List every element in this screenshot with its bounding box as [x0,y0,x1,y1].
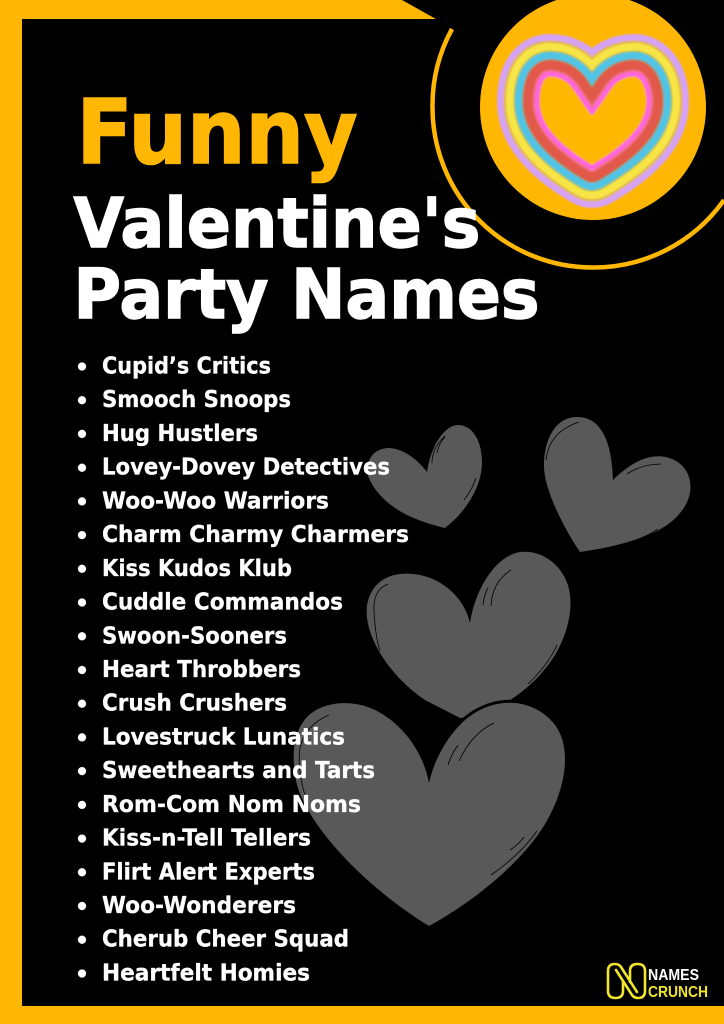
logo word: CRUNCH: CRUNCH [648,984,708,1001]
item: Kiss-n-Tell Tellers [102,825,311,852]
item: Rom-Com Nom Noms [102,791,361,818]
title line: Valentine's: Valentine's [74,184,480,264]
heart: tilted right [544,417,690,552]
item: Sweethearts and Tarts [102,757,375,784]
item: Smooch Snoops [102,386,291,413]
item: Cupid’s Critics [102,352,271,380]
item: Crush Crushers [102,690,287,717]
item: Cherub Cheer Squad [102,926,349,953]
yellow ring arc [432,29,724,268]
item: Charm Charmy Charmers [102,521,409,548]
title line: Funny: Funny [76,80,358,184]
heart: small tilted left [367,425,482,528]
item: Swoon-Sooners [102,622,287,649]
item: Hug Hustlers [102,420,258,447]
list of party names [78,352,409,986]
icon: N monogram [608,964,645,998]
item: Heartfelt Homies [102,960,310,986]
heart: biggest bottom [294,703,565,926]
heart: large middle [367,552,570,718]
item: Lovey-Dovey Detectives [102,454,390,481]
item: Cuddle Commandos [102,588,343,616]
title [74,80,540,335]
item: Woo-Woo Warriors [102,487,329,514]
icon: neon rainbow heart [537,74,649,168]
title line: Party Names: Party Names [74,255,540,335]
logo word: NAMES: NAMES [648,967,699,984]
logo: Names Crunch [608,964,708,1001]
yellow circle badge [480,0,706,220]
list bullets [78,362,86,978]
item: Flirt Alert Experts [102,858,315,885]
item: Heart Throbbers [102,656,301,683]
item: Woo-Wonderers [102,892,296,919]
item: Lovestruck Lunatics [102,723,345,750]
item: Kiss Kudos Klub [102,555,292,582]
